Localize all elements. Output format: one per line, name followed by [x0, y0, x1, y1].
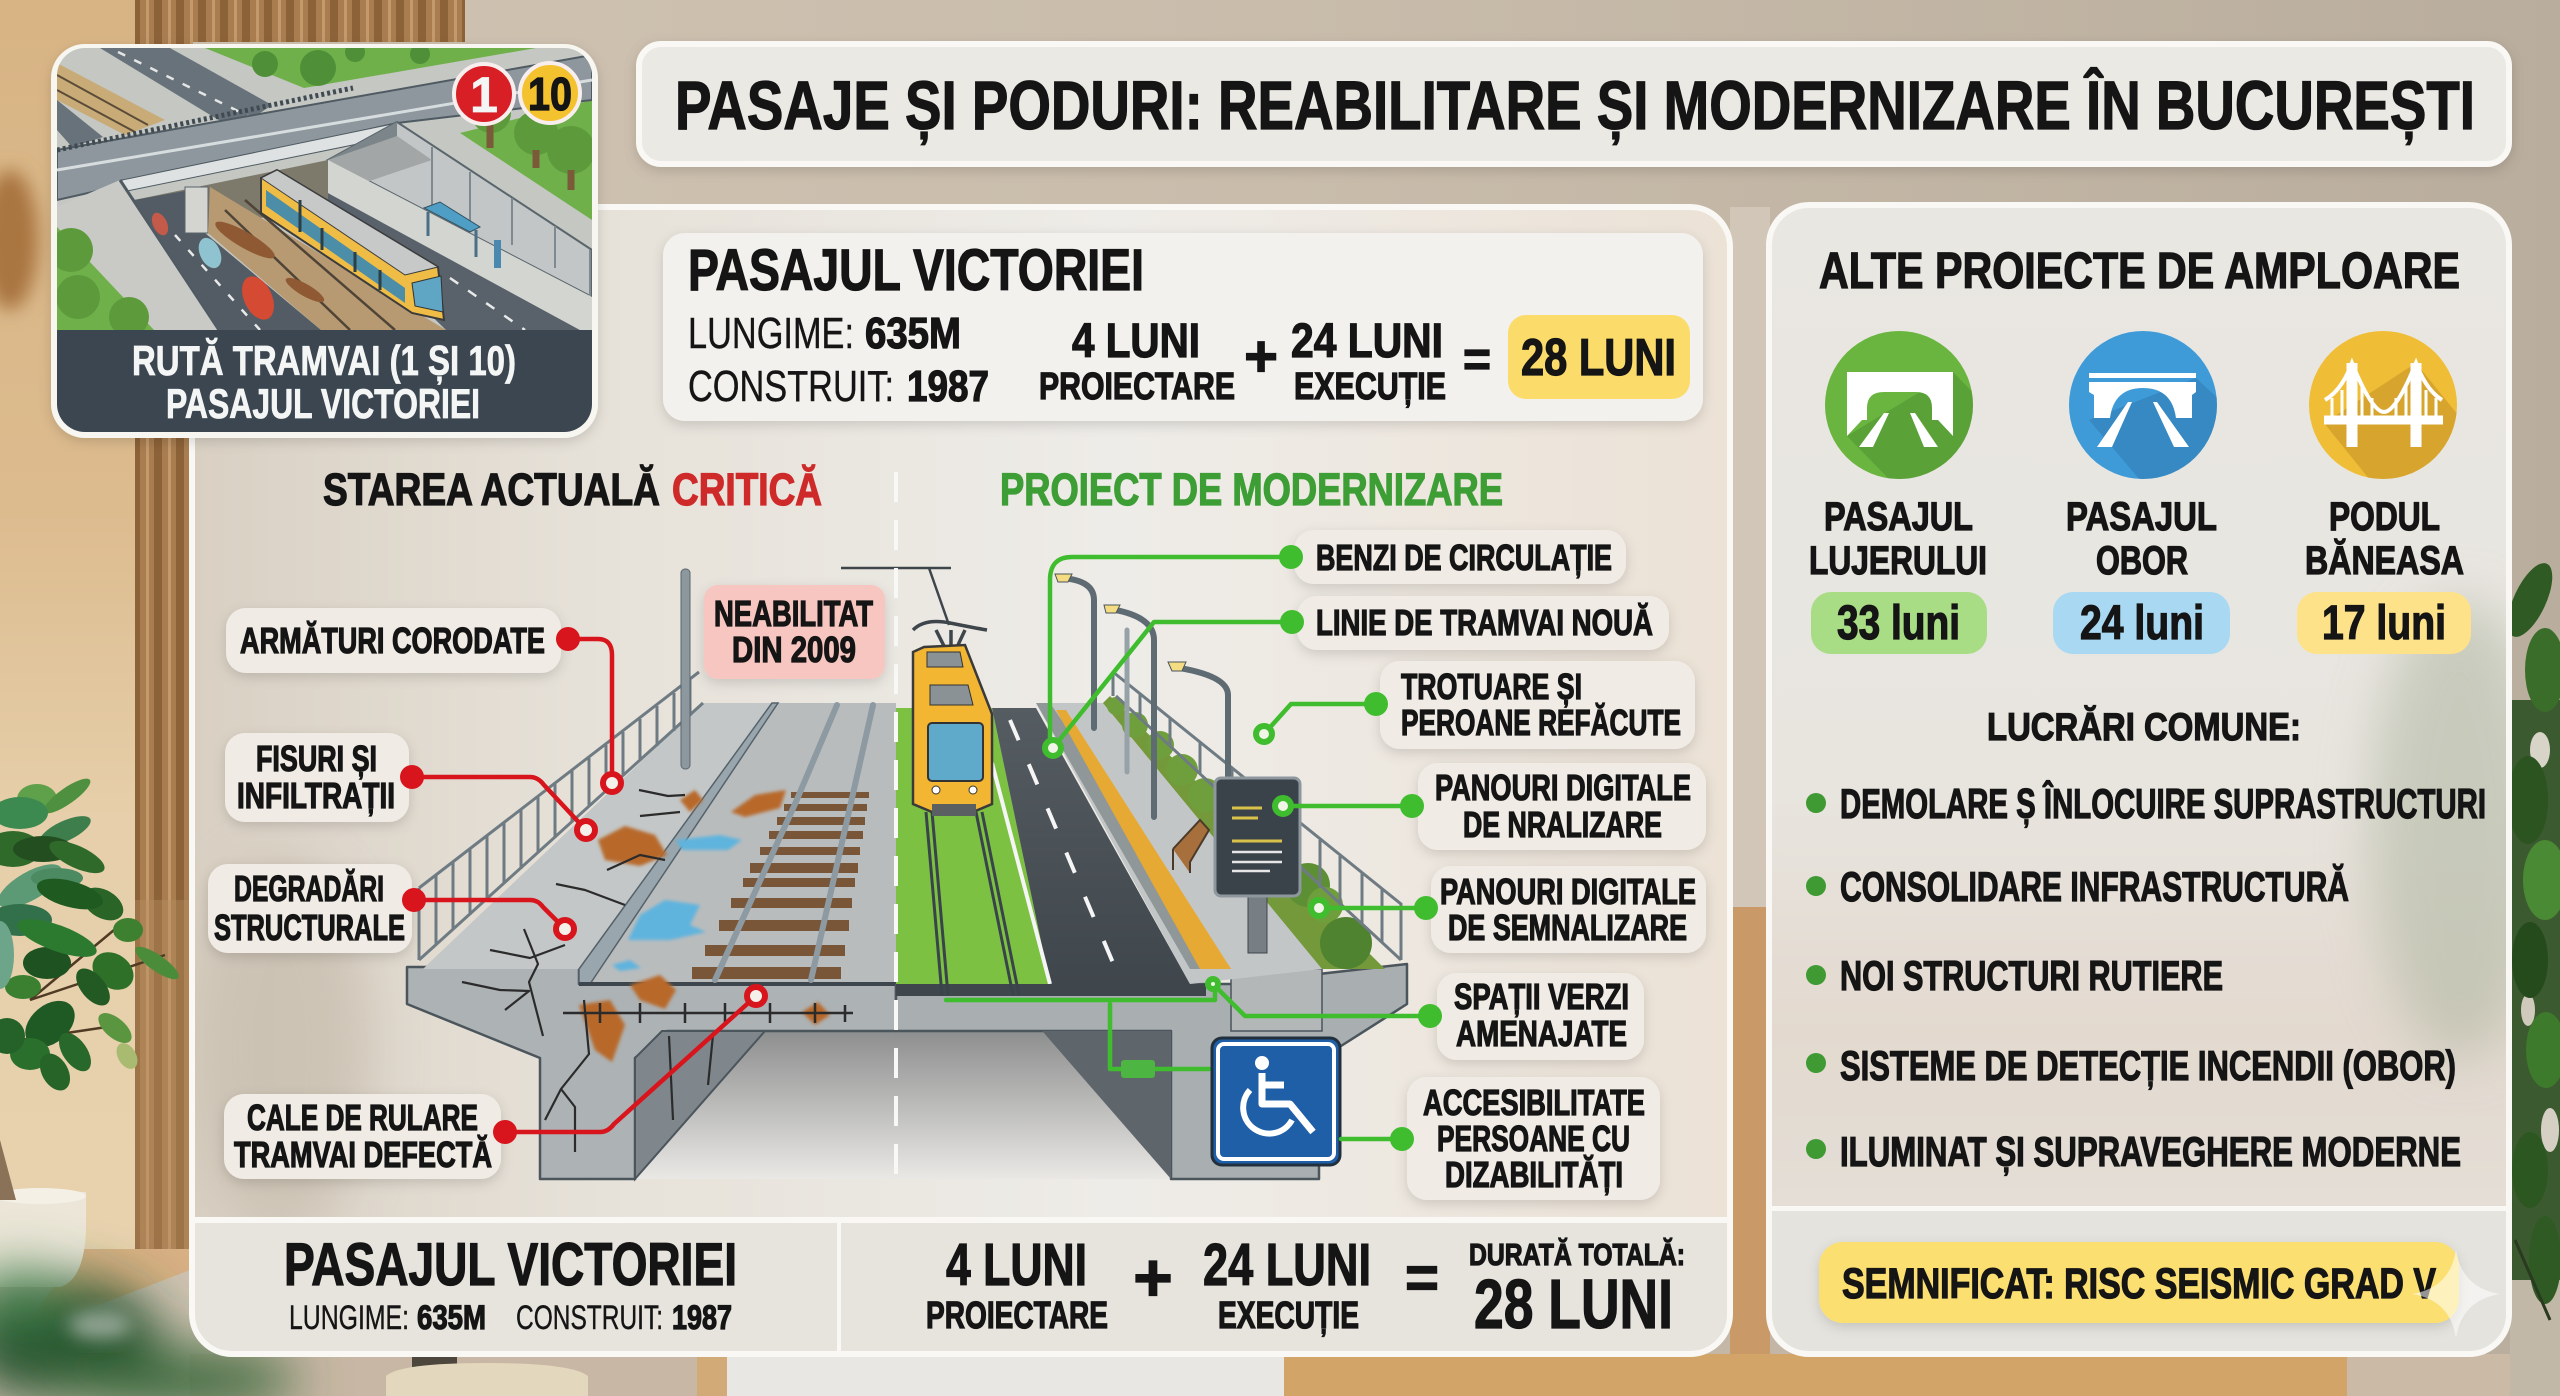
footer: duration formula: 4 LUNI	[946, 1232, 1087, 1298]
badge: 24 months: 24 luni	[2080, 597, 2204, 650]
callout: structural damage: STRUCTURALE	[214, 907, 405, 948]
overpass deck	[57, 55, 592, 200]
callout: not rehabilitated since 2009: DIN 2009	[732, 629, 856, 670]
callout: structural damage	[208, 864, 426, 953]
callout: defective tram track: CALE DE RULARE	[247, 1097, 478, 1138]
callout: new tram line: LINIE DE TRAMVAI NOUĂ	[1316, 602, 1653, 643]
decoration: right plant	[2499, 557, 2560, 1396]
list: common works: CONSOLIDARE INFRASTRUCTURĂ	[1840, 863, 2349, 910]
callout: rebuilt sidewalks and platforms	[1364, 661, 1695, 749]
bus shelter	[424, 202, 480, 232]
callout: digital signage panels: DE SEMNALIZARE	[1448, 907, 1687, 948]
footer: duration formula: DURATĂ TOTALĂ:	[1469, 1237, 1685, 1272]
left sidewalk and greenery	[57, 180, 219, 330]
footer: duration formula: 24 LUNI	[1203, 1232, 1371, 1298]
caption band	[57, 330, 592, 432]
label: Pasajul Obor	[2066, 495, 2217, 583]
callout: rebuilt sidewalks and platforms: PEROANE REFĂCUTE	[1401, 702, 1681, 743]
duration: execution	[1291, 315, 1446, 408]
callout: accessibility: PERSOANE CU	[1437, 1118, 1630, 1159]
card: tram route thumbnail	[49, 42, 598, 438]
footer: project name and facts: 1987	[672, 1299, 732, 1337]
badge: 17 months: 17 luni	[2322, 597, 2446, 650]
caption band: RUTĂ TRAMVAI (1 ȘI 10)	[132, 337, 516, 385]
bench	[1173, 820, 1209, 873]
duration: execution: EXECUȚIE	[1294, 366, 1446, 408]
callout: corroded rebar	[226, 608, 580, 673]
heading: current state: STAREA ACTUALĂ	[323, 464, 660, 515]
duration: design: PROIECTARE	[1039, 366, 1235, 408]
callout: cracks and leaks	[225, 733, 424, 822]
footer strip background	[192, 1220, 1730, 1354]
icon: Obor underpass	[2069, 331, 2225, 480]
tram line badges: 1	[470, 67, 498, 123]
footer: duration formula: PROIECTARE	[926, 1295, 1108, 1337]
cars	[236, 271, 280, 325]
callout: new tram line	[1280, 596, 1669, 650]
total duration badge	[1508, 315, 1690, 399]
illustration: degraded bridge half	[407, 569, 896, 1179]
label: Pasajul Lujerului	[1809, 495, 1987, 583]
label: Podul Baneasa: BĂNEASA	[2305, 538, 2464, 583]
railing	[419, 672, 703, 960]
caption band: PASAJUL VICTORIEI	[166, 380, 480, 427]
callout: rebuilt sidewalks and platforms: TROTUARE ȘI	[1401, 666, 1582, 707]
cracks	[462, 790, 853, 1152]
water puddles	[612, 835, 742, 971]
label: Pasajul Obor: PASAJUL	[2066, 495, 2217, 539]
sleepers	[692, 792, 869, 979]
railing	[1113, 672, 1401, 960]
list: common works	[1806, 779, 2486, 1176]
callout: green spaces	[1418, 973, 1644, 1060]
callout: corroded rebar: ARMĂTURI CORODATE	[240, 620, 545, 661]
callout: structural damage: DEGRADĂRI	[234, 868, 384, 909]
green leader lines	[1045, 557, 1430, 1139]
green connector lines	[946, 984, 1215, 1069]
fact: built: 1987	[907, 362, 989, 411]
rails	[715, 705, 873, 980]
duration: design	[1039, 315, 1235, 408]
callout: accessibility: DIZABILITĂȚI	[1445, 1154, 1623, 1195]
plug icon	[1121, 1060, 1155, 1078]
fact: length: LUNGIME:	[688, 309, 854, 358]
callout: accessibility: ACCESIBILITATE	[1423, 1082, 1645, 1123]
fact: built: CONSTRUIT:	[688, 362, 894, 411]
callout: digital panels (first): PANOURI DIGITALE	[1435, 767, 1691, 808]
accessibility sign	[1212, 1038, 1340, 1165]
tram	[261, 170, 444, 320]
decoration: small pot below main panel	[386, 1354, 588, 1396]
callout: defective tram track	[224, 1094, 517, 1179]
label: Pasajul Lujerului: LUJERULUI	[1809, 539, 1987, 583]
lamp post	[681, 569, 690, 769]
tram line badges	[454, 63, 580, 124]
callout: green spaces: AMENAJATE	[1456, 1013, 1627, 1054]
track bed	[208, 187, 446, 330]
illustration: shadow under bridge	[635, 1031, 1171, 1179]
footer: duration formula: 28 LUNI	[1474, 1265, 1673, 1343]
footer: project name and facts: PASAJUL VICTORIEI	[284, 1231, 737, 1298]
title banner	[639, 44, 2509, 164]
road	[992, 708, 1190, 984]
callout: green spaces: SPAȚII VERZI	[1454, 976, 1629, 1017]
heading: Pasajul Victoriei: PASAJUL VICTORIEI	[688, 238, 1144, 303]
grass corridor	[896, 708, 1050, 984]
footer: project name and facts: CONSTRUIT:	[516, 1299, 663, 1337]
road under bridge	[134, 190, 321, 330]
sidewalk	[1036, 703, 1385, 984]
decoration: sparkle	[2412, 1250, 2500, 1338]
duration: design: 4 LUNI	[1072, 315, 1200, 368]
tactile strip	[1056, 710, 1231, 969]
callout: accessibility	[1390, 1077, 1660, 1200]
callout: cracks and leaks: INFILTRAȚII	[237, 775, 395, 816]
front beam and pier	[896, 964, 1407, 1179]
tunnel wall	[328, 122, 592, 297]
plus sign: +	[1244, 324, 1278, 389]
callout: digital panels (first)	[1400, 763, 1706, 850]
label: Podul Baneasa	[2305, 495, 2464, 583]
heading: common works: LUCRĂRI COMUNE:	[1987, 705, 2301, 749]
footer: duration formula: +	[1133, 1240, 1173, 1316]
icon: Baneasa bridge	[2309, 331, 2462, 480]
street lamps	[1061, 578, 1228, 817]
digital panel	[1215, 778, 1300, 953]
equals sign: =	[1463, 331, 1491, 387]
panel: main Pasajul Victoriei	[190, 207, 1730, 1354]
illustration: overpass and tram scene	[49, 42, 595, 337]
duration: execution: 24 LUNI	[1291, 315, 1443, 368]
callout: not rehabilitated since 2009	[704, 585, 885, 679]
center dashed divider	[894, 472, 898, 1182]
callout: digital signage panels: PANOURI DIGITALE	[1440, 871, 1696, 912]
callout: not rehabilitated since 2009: NEABILITAT	[714, 593, 873, 634]
info card: Pasajul Victoriei summary	[663, 233, 1703, 421]
list: common works: NOI STRUCTURI RUTIERE	[1840, 952, 2223, 999]
label: Pasajul Obor: OBOR	[2096, 539, 2188, 583]
illustration: modernized bridge half	[841, 568, 1407, 1179]
footer: duration formula: =	[1405, 1244, 1439, 1311]
icon: Lujerului underpass	[1825, 331, 1980, 480]
right road and sidewalk	[328, 193, 580, 330]
deck edge	[896, 984, 1206, 996]
callout: digital panels (first): DE NRALIZARE	[1463, 804, 1662, 845]
rust patches	[579, 790, 830, 1062]
callout: traffic lanes: BENZI DE CIRCULAȚIE	[1316, 537, 1612, 578]
label: Pasajul Lujerului: PASAJUL	[1824, 495, 1973, 539]
footer: project name and facts: LUNGIME:	[289, 1299, 409, 1337]
tram line badges: 10	[528, 68, 572, 120]
panel: other large projects	[1769, 205, 2550, 1354]
fact: length: 635M	[865, 309, 961, 358]
heading: current state: CRITICĂ	[672, 464, 822, 515]
callout: seismic risk	[1819, 1242, 2459, 1323]
heading: modernization project: PROIECT DE MODERNIZARE	[1000, 464, 1503, 515]
badge: 33 months: 33 luni	[1837, 597, 1960, 650]
decoration: left plant and pot	[0, 773, 300, 1396]
tracks	[926, 812, 1019, 995]
callout: digital signage panels	[1414, 866, 1706, 953]
total duration badge: 28 LUNI	[1521, 329, 1676, 387]
footer: project name and facts	[284, 1231, 737, 1337]
footer: duration formula: EXECUȚIE	[1218, 1295, 1359, 1337]
footer: project name and facts: 635M	[417, 1299, 486, 1337]
callout: traffic lanes	[1279, 530, 1626, 584]
callout: cracks and leaks: FISURI ȘI	[256, 738, 377, 779]
tram	[841, 568, 992, 816]
footer: duration formula	[926, 1232, 1685, 1343]
callout: defective tram track: TRAMVAI DEFECTĂ	[234, 1134, 492, 1175]
bushes	[1107, 697, 1372, 969]
label: Podul Baneasa: PODUL	[2329, 495, 2440, 539]
red leader lines	[412, 639, 765, 1132]
